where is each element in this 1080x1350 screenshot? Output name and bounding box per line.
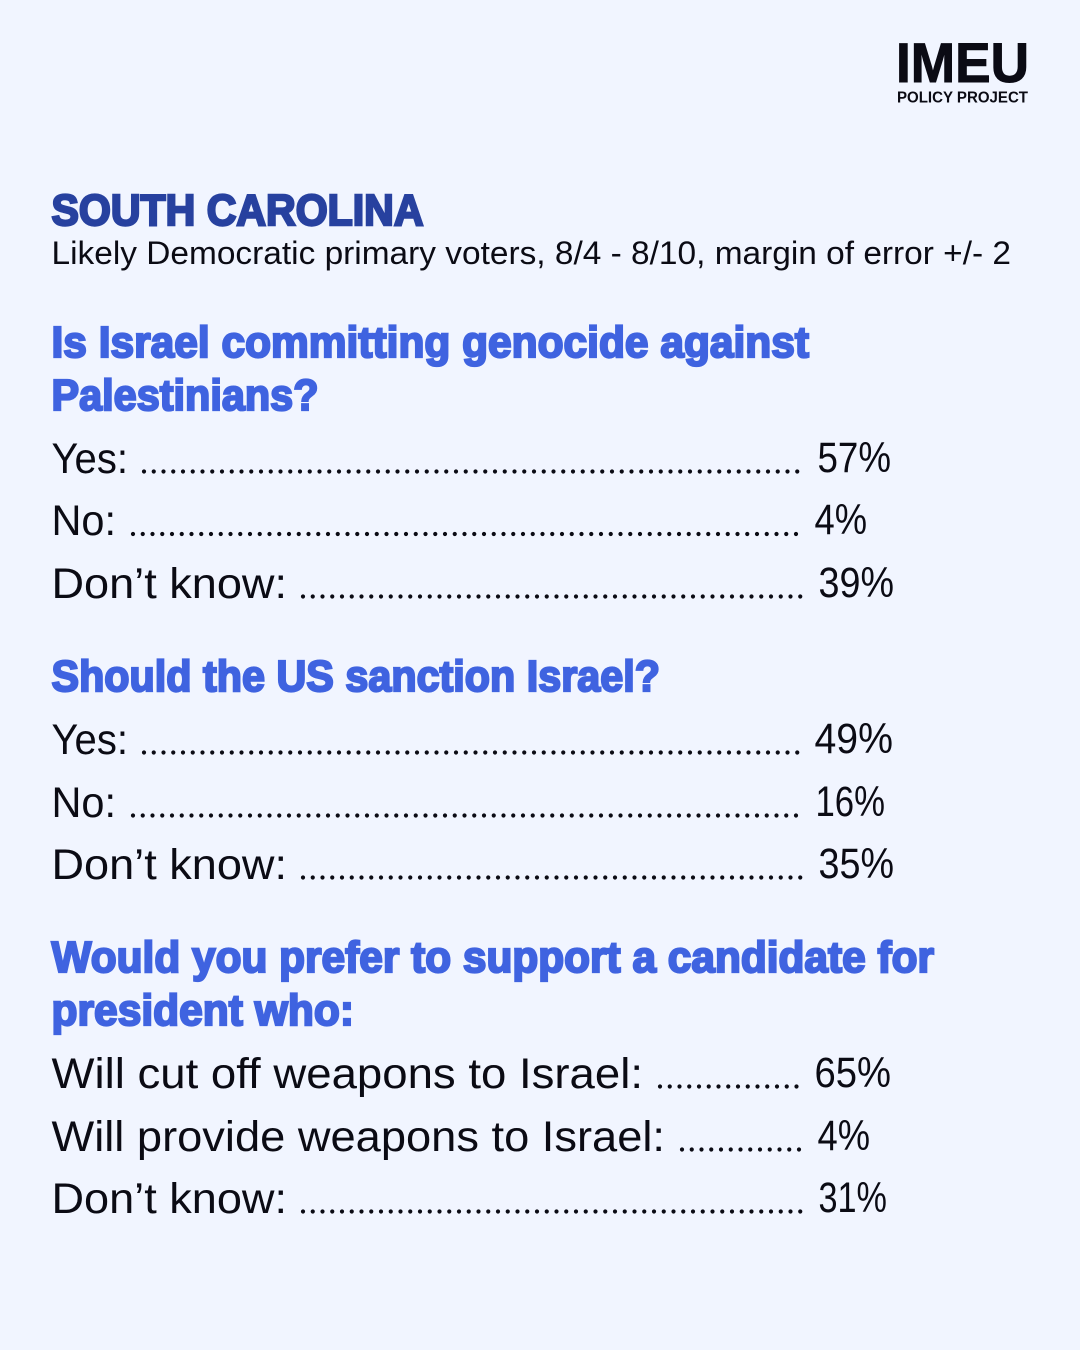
logo: IMEU Policy Project: POLICY PROJECT (897, 90, 1029, 106)
row: yes 57% (52, 434, 891, 483)
heading: sanction question: Should the US sanction Israel? (52, 652, 660, 701)
row: don't know 39% (52, 559, 894, 608)
row: no 16%: No: (52, 779, 116, 827)
row: no 16% (52, 778, 885, 827)
panel: sanction question (52, 652, 894, 889)
row: don't know 35%: 35% (818, 840, 894, 888)
row: provide weapons 4%: Will provide weapons to Israel: (52, 1113, 665, 1161)
title: SOUTH CAROLINA (52, 186, 424, 235)
heading: genocide question (52, 318, 809, 420)
row: yes 49%: 49% (814, 715, 893, 763)
row: provide weapons 4%: 4% (818, 1112, 870, 1160)
row: don't know 31%: 31% (818, 1174, 887, 1222)
row: don't know 35%: Don’t know: (52, 841, 287, 889)
subtitle: Likely Democratic primary voters, 8/4 - 8/10, margin of error +/- 2 (52, 235, 1011, 271)
panel: genocide question (52, 318, 894, 608)
heading: candidate question (52, 933, 934, 1035)
row: no 4%: 4% (814, 496, 867, 544)
row: no 4%: No: (52, 497, 116, 545)
row: cut off weapons 65% (52, 1049, 891, 1098)
row: cut off weapons 65%: 65% (814, 1049, 891, 1097)
row: don't know 31%: Don’t know: (52, 1175, 287, 1223)
row: yes 57%: Yes: (52, 435, 128, 483)
row: no 16%: 16% (816, 778, 885, 826)
row: provide weapons 4% (52, 1112, 870, 1161)
row: don't know 39%: 39% (818, 559, 894, 607)
row: don't know 39%: Don’t know: (52, 560, 287, 608)
heading: candidate question: Would you prefer to support a candidate for (52, 933, 934, 982)
row: cut off weapons 65%: Will cut off weapons to Israel: (52, 1050, 643, 1098)
heading: genocide question: Is Israel committing genocide against (52, 318, 809, 367)
row: yes 49% (52, 715, 893, 764)
row: yes 49%: Yes: (52, 716, 128, 764)
heading: candidate question: president who: (52, 986, 354, 1035)
row: don't know 35% (52, 840, 894, 889)
logo: IMEU Policy Project: IMEU (896, 31, 1029, 94)
panel: candidate question (52, 933, 934, 1223)
row: don't know 31% (52, 1174, 887, 1223)
heading: genocide question: Palestinians? (52, 371, 318, 420)
row: yes 57%: 57% (818, 434, 891, 482)
row: no 4% (52, 496, 867, 545)
